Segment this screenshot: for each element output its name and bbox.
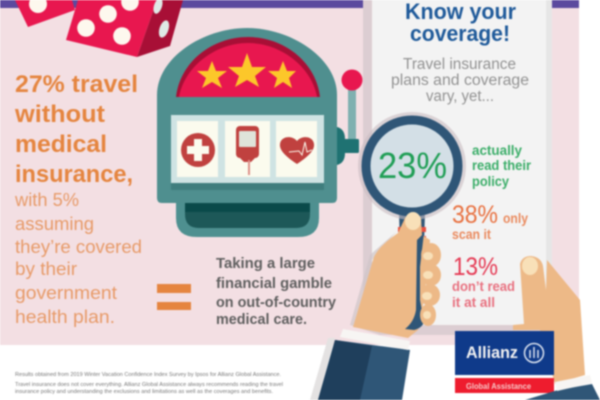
headline: 27% travel without medical insurance — [14, 71, 138, 188]
machine body — [157, 28, 337, 203]
left hand holding magnifier — [353, 212, 441, 338]
stat: 38% only scan it: scan it — [452, 227, 491, 242]
text: travel insurance plans — [391, 56, 529, 105]
lower handle — [405, 233, 424, 330]
text: travel insurance plans: plans and coverage — [391, 72, 529, 89]
subtext: government health plan — [14, 189, 142, 327]
slot machine — [157, 28, 362, 237]
stars — [197, 53, 296, 88]
footnotes — [15, 372, 283, 395]
text: taking a large financial gamble: on out-of-country — [216, 294, 337, 311]
stat: 38% only scan it — [452, 201, 528, 242]
dice — [15, 0, 183, 57]
payout tray — [176, 200, 319, 237]
subtext: government health plan: health plan. — [15, 306, 115, 327]
icon: heart with pulse — [280, 137, 314, 164]
text: travel insurance plans: Travel insurance — [403, 56, 516, 73]
stat: 38% only scan it: only — [503, 211, 528, 226]
Allianz logo: Global Assistance — [466, 382, 532, 391]
footnotes: Results obtained from 2019 Winter Vacation Confidence Index Survey by Ipsos for Allianz Global Assistance. — [15, 372, 281, 378]
lens — [360, 114, 464, 218]
stat: 13% don't read it at all: it at all — [452, 295, 495, 310]
footnotes: insurance policy and understanding the exclusions and limitations as well as the coverages and benefits. — [15, 389, 273, 395]
stat: actually read their policy: read their — [472, 158, 532, 173]
paper shadow — [363, 0, 552, 335]
top purple bar — [0, 0, 579, 8]
right hand holding paper — [513, 256, 585, 384]
hand shadow on paper — [350, 232, 396, 335]
headline: 27% travel without medical insurance: medical — [15, 131, 107, 158]
fingers — [420, 243, 441, 326]
lever — [337, 70, 362, 165]
policy paper — [372, 0, 552, 325]
stat: 13% don't read it at all: don’t read — [452, 279, 515, 294]
headline: 27% travel without medical insurance: insurance, — [15, 161, 133, 188]
headline: 27% travel without medical insurance: without — [14, 101, 105, 128]
left suit sleeve — [310, 329, 410, 400]
left die — [15, 0, 75, 27]
text: travel insurance plans: vary, yet... — [426, 88, 494, 105]
subtext: government health plan: by their — [15, 258, 77, 279]
text: taking a large financial gamble: financial gamble — [216, 275, 332, 292]
right die — [66, 0, 183, 57]
icon: medical cross — [181, 133, 215, 167]
magnifying glass — [360, 114, 464, 245]
icon: blood bag — [236, 126, 259, 175]
footnotes: Travel insurance does not cover everything. Allianz Global Assistance always recommends reading the travel — [15, 382, 283, 388]
text: taking a large financial gamble: Taking a large — [216, 255, 315, 272]
stat: 13% don't read it at all: 13% — [453, 253, 498, 281]
heading: know your coverage — [405, 0, 516, 46]
headline: 27% travel without medical insurance: 27% travel — [15, 71, 138, 98]
stat: actually read their policy: actually — [472, 143, 522, 158]
23% figure: 23% — [378, 145, 447, 186]
subtext: government health plan: assuming — [15, 213, 94, 234]
Allianz logo: Allianz — [466, 343, 518, 362]
stat: 13% don't read it at all — [452, 253, 515, 310]
heading: know your coverage: coverage! — [410, 21, 510, 46]
palm and thumb — [353, 213, 430, 338]
nails — [405, 212, 433, 319]
text: taking a large financial gamble — [216, 255, 337, 328]
reel window — [171, 115, 324, 190]
subtext: government health plan: with 5% — [14, 189, 79, 210]
right suit sleeve — [525, 375, 600, 400]
logo emblem — [524, 344, 544, 362]
Allianz logo — [455, 331, 554, 393]
dome — [176, 37, 320, 97]
stat: 38% only scan it: 38% — [452, 201, 498, 229]
text: taking a large financial gamble: medical care. — [216, 311, 307, 328]
stat: actually read their policy — [472, 143, 532, 189]
handle neck with red bands — [398, 212, 426, 245]
stat: actually read their policy: policy — [472, 174, 509, 189]
equals sign — [157, 284, 191, 310]
subtext: government health plan: government — [15, 282, 117, 303]
subtext: government health plan: they’re covered — [15, 236, 142, 257]
